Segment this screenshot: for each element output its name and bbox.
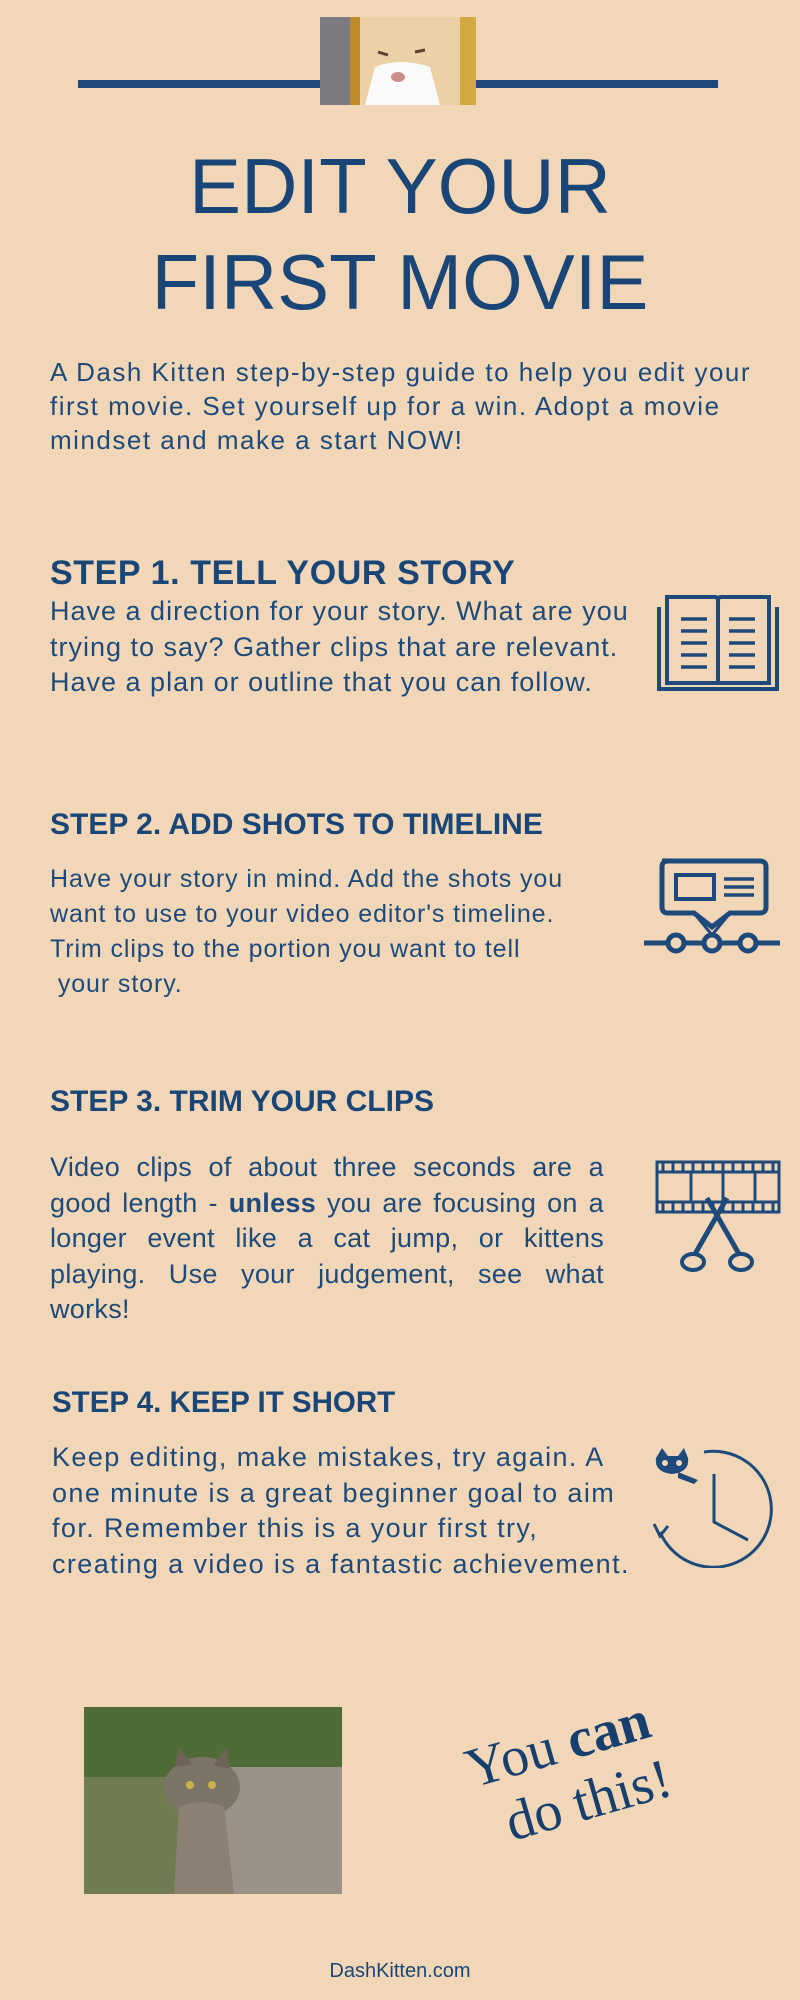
step 1 text: trying to say? Gather clips that are relevant. [50,632,618,662]
step 1 text: Have a direction for your story. What are you [50,596,629,626]
intro text: A Dash Kitten step-by-step guide to help you edit your [50,357,751,387]
title: FIRST MOVIE [152,238,648,326]
slogan: you can do this: You can [459,1689,657,1801]
icon: timeline [644,858,780,954]
step 2 heading: STEP 2. ADD SHOTS TO TIMELINE [50,808,543,841]
header line right [476,80,718,88]
step 4 heading: STEP 4. KEEP IT SHORT [52,1386,395,1419]
slogan: you can do this [459,1689,678,1854]
intro text: first movie. Set yourself up for a win. Adopt a movie [50,391,721,421]
icon: book [657,595,779,691]
step 1 text: Have a plan or outline that you can follow. [50,667,593,697]
header line left [78,80,322,88]
title: EDIT YOUR [189,142,611,230]
bottom cat photo [84,1707,342,1894]
step 2 text [50,865,563,998]
intro text [50,357,751,455]
step 4 text: creating a video is a fantastic achievement. [52,1548,630,1578]
step 2 text: want to use to your video editor's timeline. [50,900,554,928]
header cat photo [320,17,476,105]
icon: cat clock [652,1448,773,1568]
step 2 text: your story. [58,970,183,998]
step 4 text: Keep editing, make mistakes, try again. A [52,1442,605,1472]
intro text: mindset and make a start NOW! [50,425,463,455]
slogan: you can do this: do this! [498,1747,678,1854]
step 1 text [50,596,629,697]
step 4 text: one minute is a great beginner goal to aim [52,1478,615,1508]
icon: film and scissors [656,1160,780,1272]
step 4 text [52,1442,630,1578]
step 1 heading: STEP 1. TELL YOUR STORY [50,554,515,592]
step 3 text: Video clips of about three seconds are a good length - unless you are focusing on a longer event like a cat jump, or kittens playing. Use your judgement, see what works! [50,1152,604,1324]
step 2 text: Trim clips to the portion you want to tell [50,935,520,963]
title [152,142,648,326]
step 3 heading: STEP 3. TRIM YOUR CLIPS [50,1085,434,1118]
step 4 text: for. Remember this is a your first try, [52,1513,538,1543]
footer: DashKitten.com [329,1960,471,1982]
step 2 text: Have your story in mind. Add the shots you [50,865,563,893]
